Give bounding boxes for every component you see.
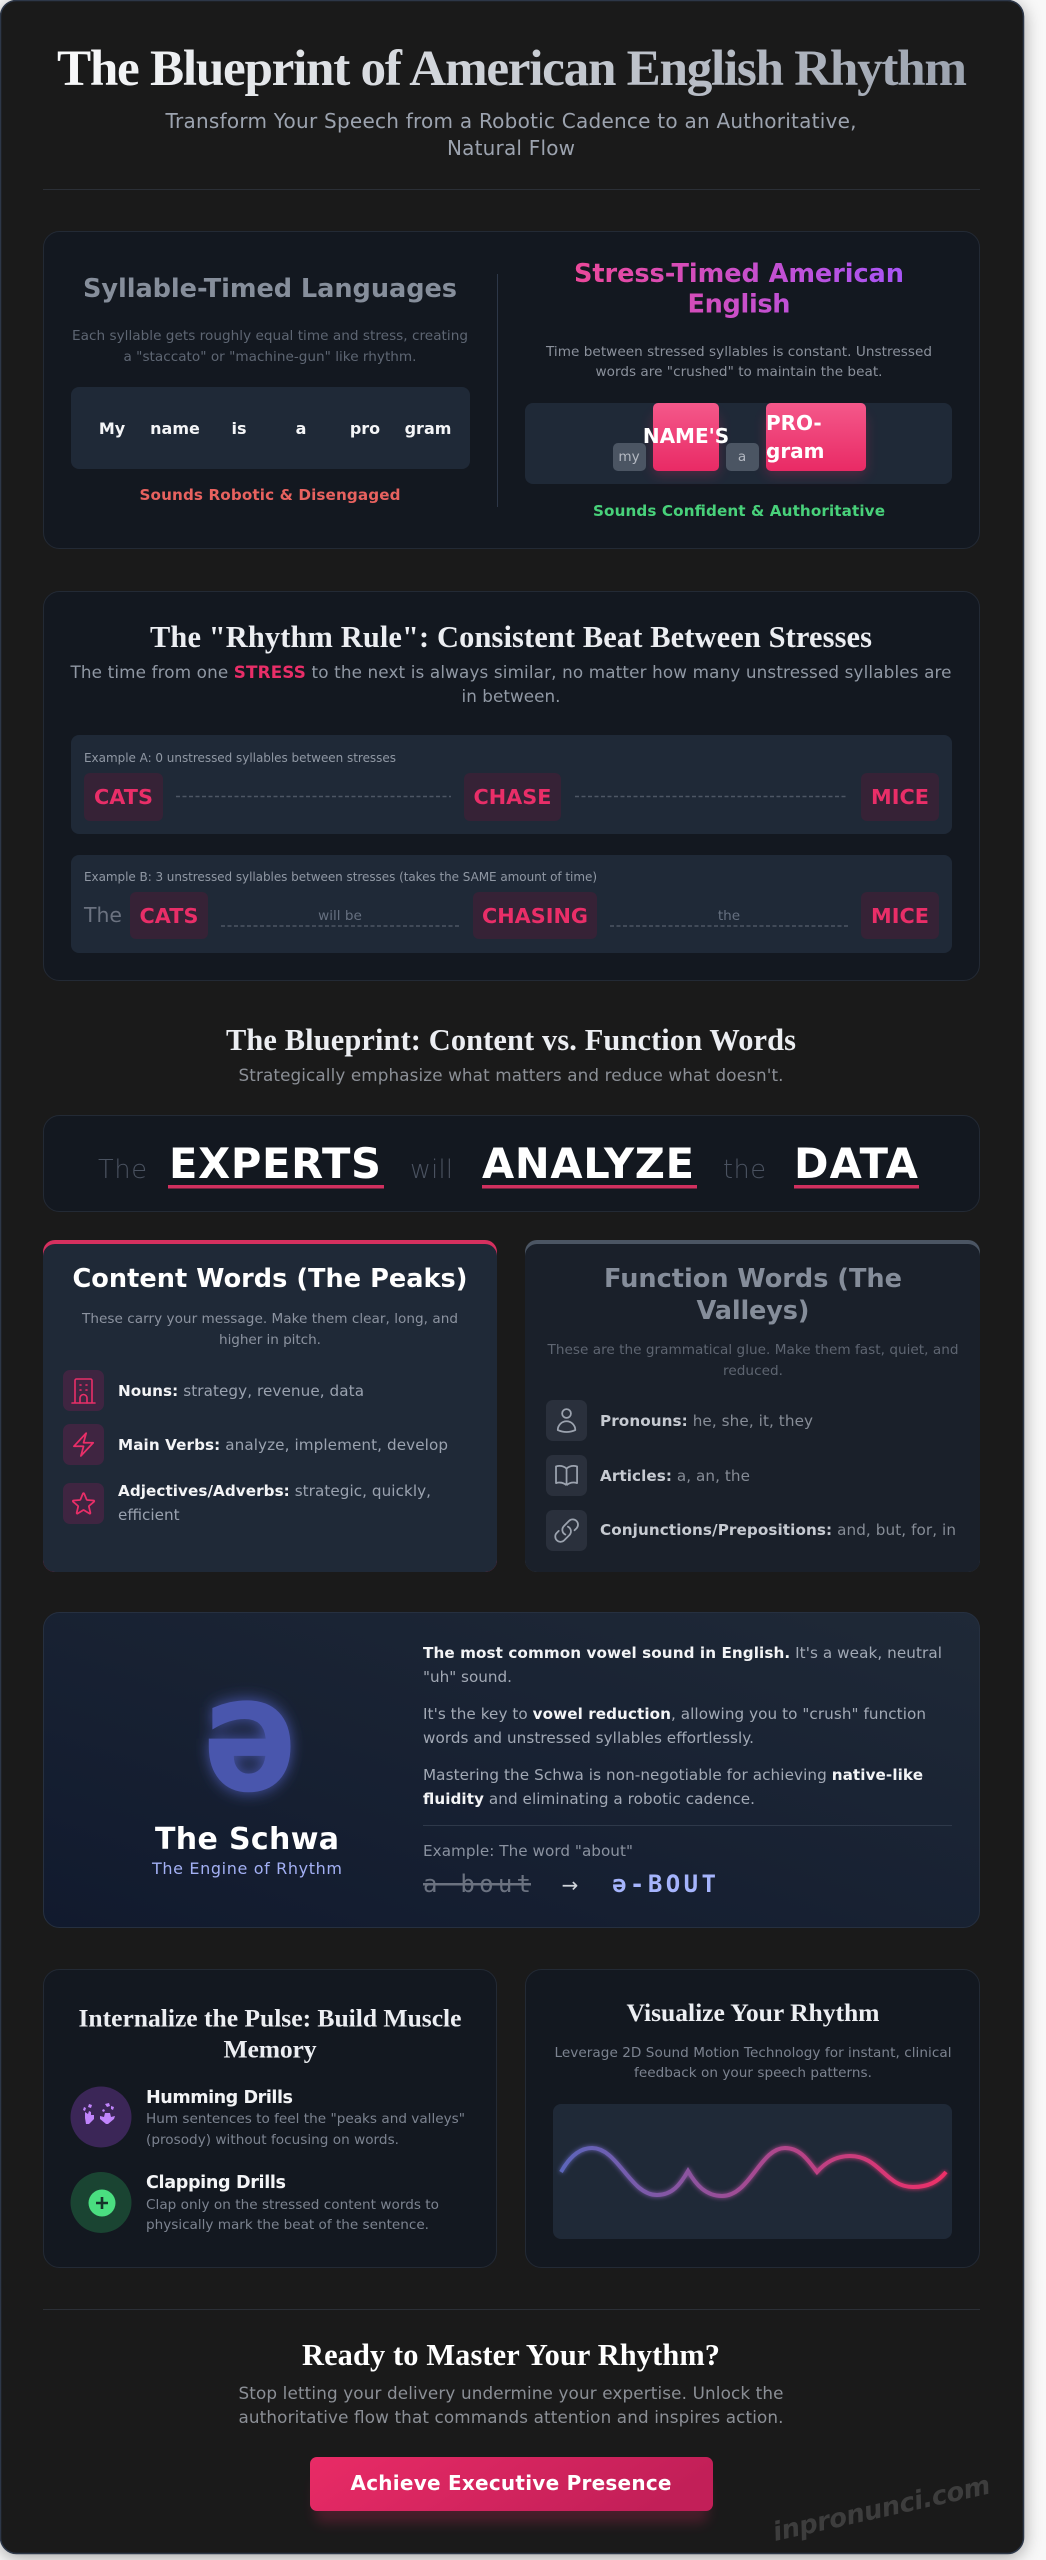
example B: CHASING xyxy=(482,904,588,928)
subtitle: Natural Flow xyxy=(447,136,575,160)
stress beat box: PRO- xyxy=(766,411,822,435)
item: nouns: Nouns: strategy, revenue, data xyxy=(118,1382,364,1400)
schwa explanation: Mastering the Schwa is non-negotiable for achieving native-like xyxy=(423,1766,923,1784)
item: adjectives and adverbs: Adjectives/Adverbs: strategic, quickly, xyxy=(118,1482,431,1500)
item: adjectives and adverbs xyxy=(63,1482,431,1524)
CTA text xyxy=(238,2383,784,2427)
schwa example: a bout xyxy=(423,1870,531,1898)
button xyxy=(310,2457,713,2523)
panel: example sentence: the xyxy=(723,1155,766,1185)
drill: humming: (prosody) without focusing on words. xyxy=(146,2132,399,2148)
schwa example xyxy=(423,1842,716,1898)
schwa explanation: It's the key to vowel reduction, allowing you to "crush" function xyxy=(423,1705,926,1723)
CTA heading: Ready to Master Your Rhythm? xyxy=(302,2338,720,2372)
syllable beat box: is xyxy=(231,419,247,438)
stress beat box: my xyxy=(618,449,640,465)
icon: humming xyxy=(83,2103,115,2124)
description xyxy=(81,1311,458,1348)
schwa heading: The Schwa xyxy=(155,1822,339,1857)
stress beat box xyxy=(525,403,952,484)
section heading: content vs function xyxy=(226,1023,796,1085)
syllable beat box: name xyxy=(150,419,200,438)
syllable beat box xyxy=(71,387,470,469)
header xyxy=(43,40,980,190)
panel: example sentence: ANALYZE xyxy=(482,1139,694,1188)
drill: humming xyxy=(70,2086,465,2148)
panel: example sentence: The xyxy=(98,1155,147,1185)
item: conjunctions and prepositions xyxy=(546,1510,956,1551)
button: Achieve Executive Presence xyxy=(350,2471,672,2495)
syllable beat box: pro xyxy=(350,419,380,438)
drill: humming: Hum sentences to feel the "peaks and valleys" xyxy=(146,2111,465,2127)
caption: confident: Sounds Confident & Authoritative xyxy=(593,502,885,520)
card: internalize the pulse xyxy=(44,1970,496,2268)
description: a "staccato" or "machine-gun" like rhythm. xyxy=(124,349,416,365)
example A xyxy=(71,735,952,834)
example B: Example B: 3 unstressed syllables between stresses (takes the SAME amount of time) xyxy=(84,870,597,884)
schwa explanation: fluidity and eliminating a robotic cadence. xyxy=(423,1790,755,1808)
schwa example: → xyxy=(562,1873,578,1897)
heading: internalize xyxy=(78,2004,462,2064)
schwa explanation: The most common vowel sound in English. It's a weak, neutral xyxy=(423,1644,942,1662)
schwa explanation xyxy=(423,1644,942,1808)
heading: function words xyxy=(604,1264,902,1326)
CTA text: Stop letting your delivery undermine your expertise. Unlock the xyxy=(238,2383,784,2403)
item: conjunctions and prepositions: Conjunctions/Prepositions: and, but, for, in xyxy=(600,1521,956,1539)
rule explanation: in between. xyxy=(462,686,560,706)
icon: person xyxy=(558,1409,575,1432)
card: visualize your rhythm xyxy=(526,1970,980,2268)
subtitle xyxy=(164,109,856,160)
panel: rhythm rule xyxy=(44,592,980,980)
heading: function words: Valleys) xyxy=(696,1296,810,1326)
item: pronouns xyxy=(546,1400,813,1441)
heading: visualize: Visualize Your Rhythm xyxy=(626,1998,880,2027)
description: Leverage 2D Sound Motion Technology for instant, clinical xyxy=(554,2045,952,2061)
call to action xyxy=(238,2338,784,2523)
schwa subtitle: The Engine of Rhythm xyxy=(151,1859,342,1878)
panel: the schwa xyxy=(44,1612,980,1928)
panel: example sentence xyxy=(44,1116,980,1212)
example A: CHASE xyxy=(474,785,551,809)
drill: clapping: physically mark the beat of the sentence. xyxy=(146,2217,429,2233)
description xyxy=(545,344,932,380)
drill: humming: Humming Drills xyxy=(146,2088,293,2108)
example B: CATS xyxy=(140,904,198,928)
rule explanation: The time from one STRESS to the next is always similar, no matter how many unstressed syllables are xyxy=(70,662,952,682)
description: feedback on your speech patterns. xyxy=(634,2065,872,2081)
syllable beat box: gram xyxy=(405,419,451,438)
panel: example sentence: EXPERTS xyxy=(169,1139,381,1188)
item: articles xyxy=(546,1455,750,1496)
example B: the xyxy=(718,908,740,924)
rule explanation xyxy=(70,662,952,706)
example A: CATS xyxy=(94,785,153,809)
icon: schwa symbol: ə xyxy=(203,1643,297,1828)
icon: chain link xyxy=(555,1519,578,1542)
icon: building xyxy=(72,1379,95,1403)
heading: content words: Content Words (The Peaks) xyxy=(72,1264,468,1294)
stress beat box: a xyxy=(738,449,746,465)
schwa example: Example: The word "about" xyxy=(423,1842,633,1860)
watermark: inpronunci.com xyxy=(770,2470,993,2548)
item: pronouns: Pronouns: he, she, it, they xyxy=(600,1412,813,1430)
schwa explanation: "uh" sound. xyxy=(423,1668,512,1686)
item: main verbs: Main Verbs: analyze, implement, develop xyxy=(118,1436,448,1454)
chart: rhythm waveform xyxy=(553,2104,952,2239)
icon: open book xyxy=(556,1466,577,1485)
heading: internalize: Memory xyxy=(224,2034,317,2064)
panel: example sentence: will xyxy=(410,1155,453,1185)
icon: clapping xyxy=(88,2190,116,2216)
example B: The xyxy=(83,903,122,927)
description: These are the grammatical glue. Make them fast, quiet, and xyxy=(546,1342,958,1358)
caption: robotic: Sounds Robotic & Disengaged xyxy=(140,486,400,504)
section heading: content vs function: The Blueprint: Content vs. Function Words xyxy=(226,1023,796,1057)
stress beat box: NAME'S xyxy=(643,424,729,448)
description: higher in pitch. xyxy=(219,1332,321,1348)
column: syllable-timed xyxy=(71,274,470,504)
description: Each syllable gets roughly equal time and stress, creating xyxy=(72,328,468,344)
stress beat box: gram xyxy=(766,439,825,463)
heading: function words: Function Words (The xyxy=(604,1264,902,1294)
drill: clapping: Clap only on the stressed content words to xyxy=(146,2197,439,2213)
section subheading: Strategically emphasize what matters and reduce what doesn't. xyxy=(238,1065,784,1085)
panel: syllable vs stress timing xyxy=(44,232,980,548)
drill: clapping: Clapping Drills xyxy=(146,2173,286,2193)
heading: rhythm rule: The "Rhythm Rule": Consistent Beat Between Stresses xyxy=(150,620,872,654)
drill: clapping xyxy=(70,2172,439,2233)
card: function words xyxy=(525,1240,980,1572)
description xyxy=(72,328,468,365)
item: adjectives and adverbs: efficient xyxy=(118,1506,180,1524)
icon: star xyxy=(73,1493,94,1514)
schwa example: ə-BOUT xyxy=(612,1870,716,1898)
item: main verbs xyxy=(63,1424,448,1465)
card: content words xyxy=(43,1240,497,1572)
example B xyxy=(71,855,952,953)
heading: stress-timed: English xyxy=(688,290,790,320)
example B: will be xyxy=(318,908,362,924)
description xyxy=(554,2045,952,2081)
CTA text: authoritative flow that commands attention and inspires action. xyxy=(238,2407,784,2427)
column: stress-timed xyxy=(525,259,952,520)
item: articles: Articles: a, an, the xyxy=(600,1467,750,1485)
panel: example sentence: DATA xyxy=(794,1139,918,1188)
syllable beat box: My xyxy=(99,419,126,438)
description: words are "crushed" to maintain the beat. xyxy=(596,364,882,380)
title: The Blueprint of American English Rhythm xyxy=(57,40,967,97)
subtitle: Transform Your Speech from a Robotic Cadence to an Authoritative, xyxy=(164,109,856,133)
example A: Example A: 0 unstressed syllables between stresses xyxy=(84,751,396,765)
example A: MICE xyxy=(871,785,929,809)
item: nouns xyxy=(63,1370,364,1411)
syllable beat box: a xyxy=(296,419,306,438)
description: Time between stressed syllables is constant. Unstressed xyxy=(545,344,932,360)
description: These carry your message. Make them clear, long, and xyxy=(81,1311,458,1327)
heading: stress-timed: Stress-Timed American xyxy=(574,259,904,289)
description: reduced. xyxy=(723,1363,783,1379)
icon: lightning bolt xyxy=(74,1433,93,1456)
schwa explanation: words and unstressed syllables effortlessly. xyxy=(423,1729,754,1747)
description xyxy=(546,1342,958,1379)
heading: internalize: Internalize the Pulse: Build Muscle xyxy=(78,2004,462,2032)
heading: stress-timed xyxy=(574,259,904,320)
example B: MICE xyxy=(871,904,929,928)
heading: syllable-timed: Syllable-Timed Languages xyxy=(83,274,457,304)
